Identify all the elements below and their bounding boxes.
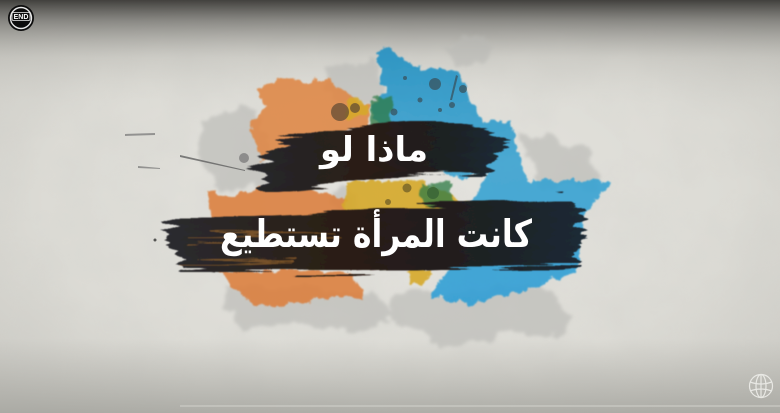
brush stroke: upper <box>250 120 510 191</box>
blue watercolor splash <box>372 46 612 303</box>
heading line 2: كانت المرأة تستطيع <box>220 209 533 256</box>
ink droplets <box>125 75 467 242</box>
orange watercolor splash, upper <box>250 78 372 160</box>
logo: END badge <box>8 5 34 31</box>
brush stroke: lower <box>163 197 587 273</box>
yellow watercolor splash <box>345 96 470 287</box>
orange watercolor splash, lower <box>207 187 365 307</box>
logo: END badge: END <box>14 14 28 21</box>
green ink overlap <box>372 96 452 207</box>
grey watercolor splashes <box>198 36 600 352</box>
heading line 1: ماذا لو <box>318 130 428 170</box>
icon: globe logo <box>750 374 772 398</box>
